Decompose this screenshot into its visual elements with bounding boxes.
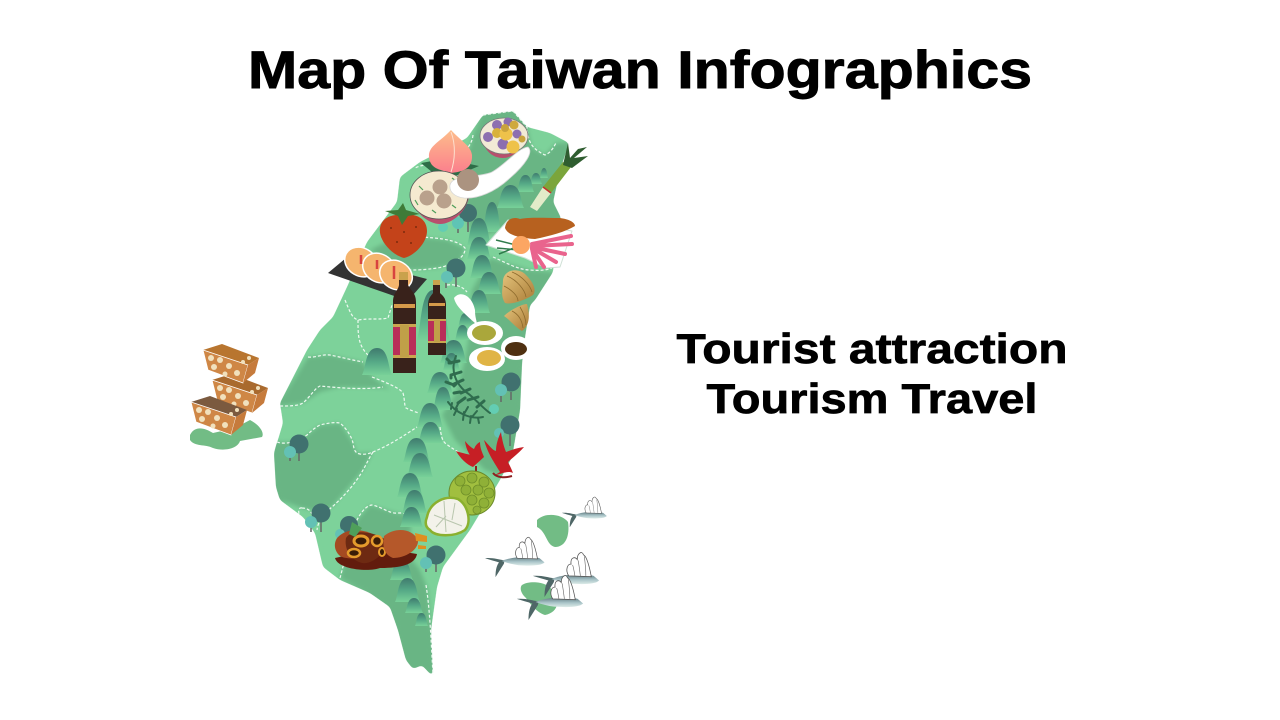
icon: fried fish plate [486,218,575,268]
top nougat block [203,344,259,383]
icon: nougat blocks on islet [190,344,268,450]
icon: meatball soup and spoon [410,147,530,224]
trees [284,204,520,572]
subtitle text block [676,325,1068,422]
island land and regions [274,111,569,677]
mountains [362,168,548,626]
icon: flying fish group [485,497,607,620]
icon: braised pork knuckle [335,522,427,570]
icon: fern [446,356,490,423]
bottom nougat block [191,396,247,435]
middle nougat block [212,374,268,413]
icon: soy sauce bottles [393,272,446,373]
icon: bamboo shoots [502,270,535,331]
title: Map Of Taiwan Infographics [248,41,1032,100]
icon: taro ball bowl [480,118,528,158]
icon: spice dishes [454,294,531,371]
subtitle text block: Tourist attraction [676,325,1068,372]
icon: sun cakes on tray [328,241,427,298]
icon: roselle flowers [456,432,524,477]
icon: custard apple [426,471,495,535]
icon: strawberry [380,203,427,258]
map of Taiwan [274,111,569,677]
icon: green onion [530,143,588,211]
subtitle text block: Tourism Travel [706,375,1038,422]
region borders [277,111,556,675]
icon: peach [420,130,479,185]
small green islets [537,515,568,547]
